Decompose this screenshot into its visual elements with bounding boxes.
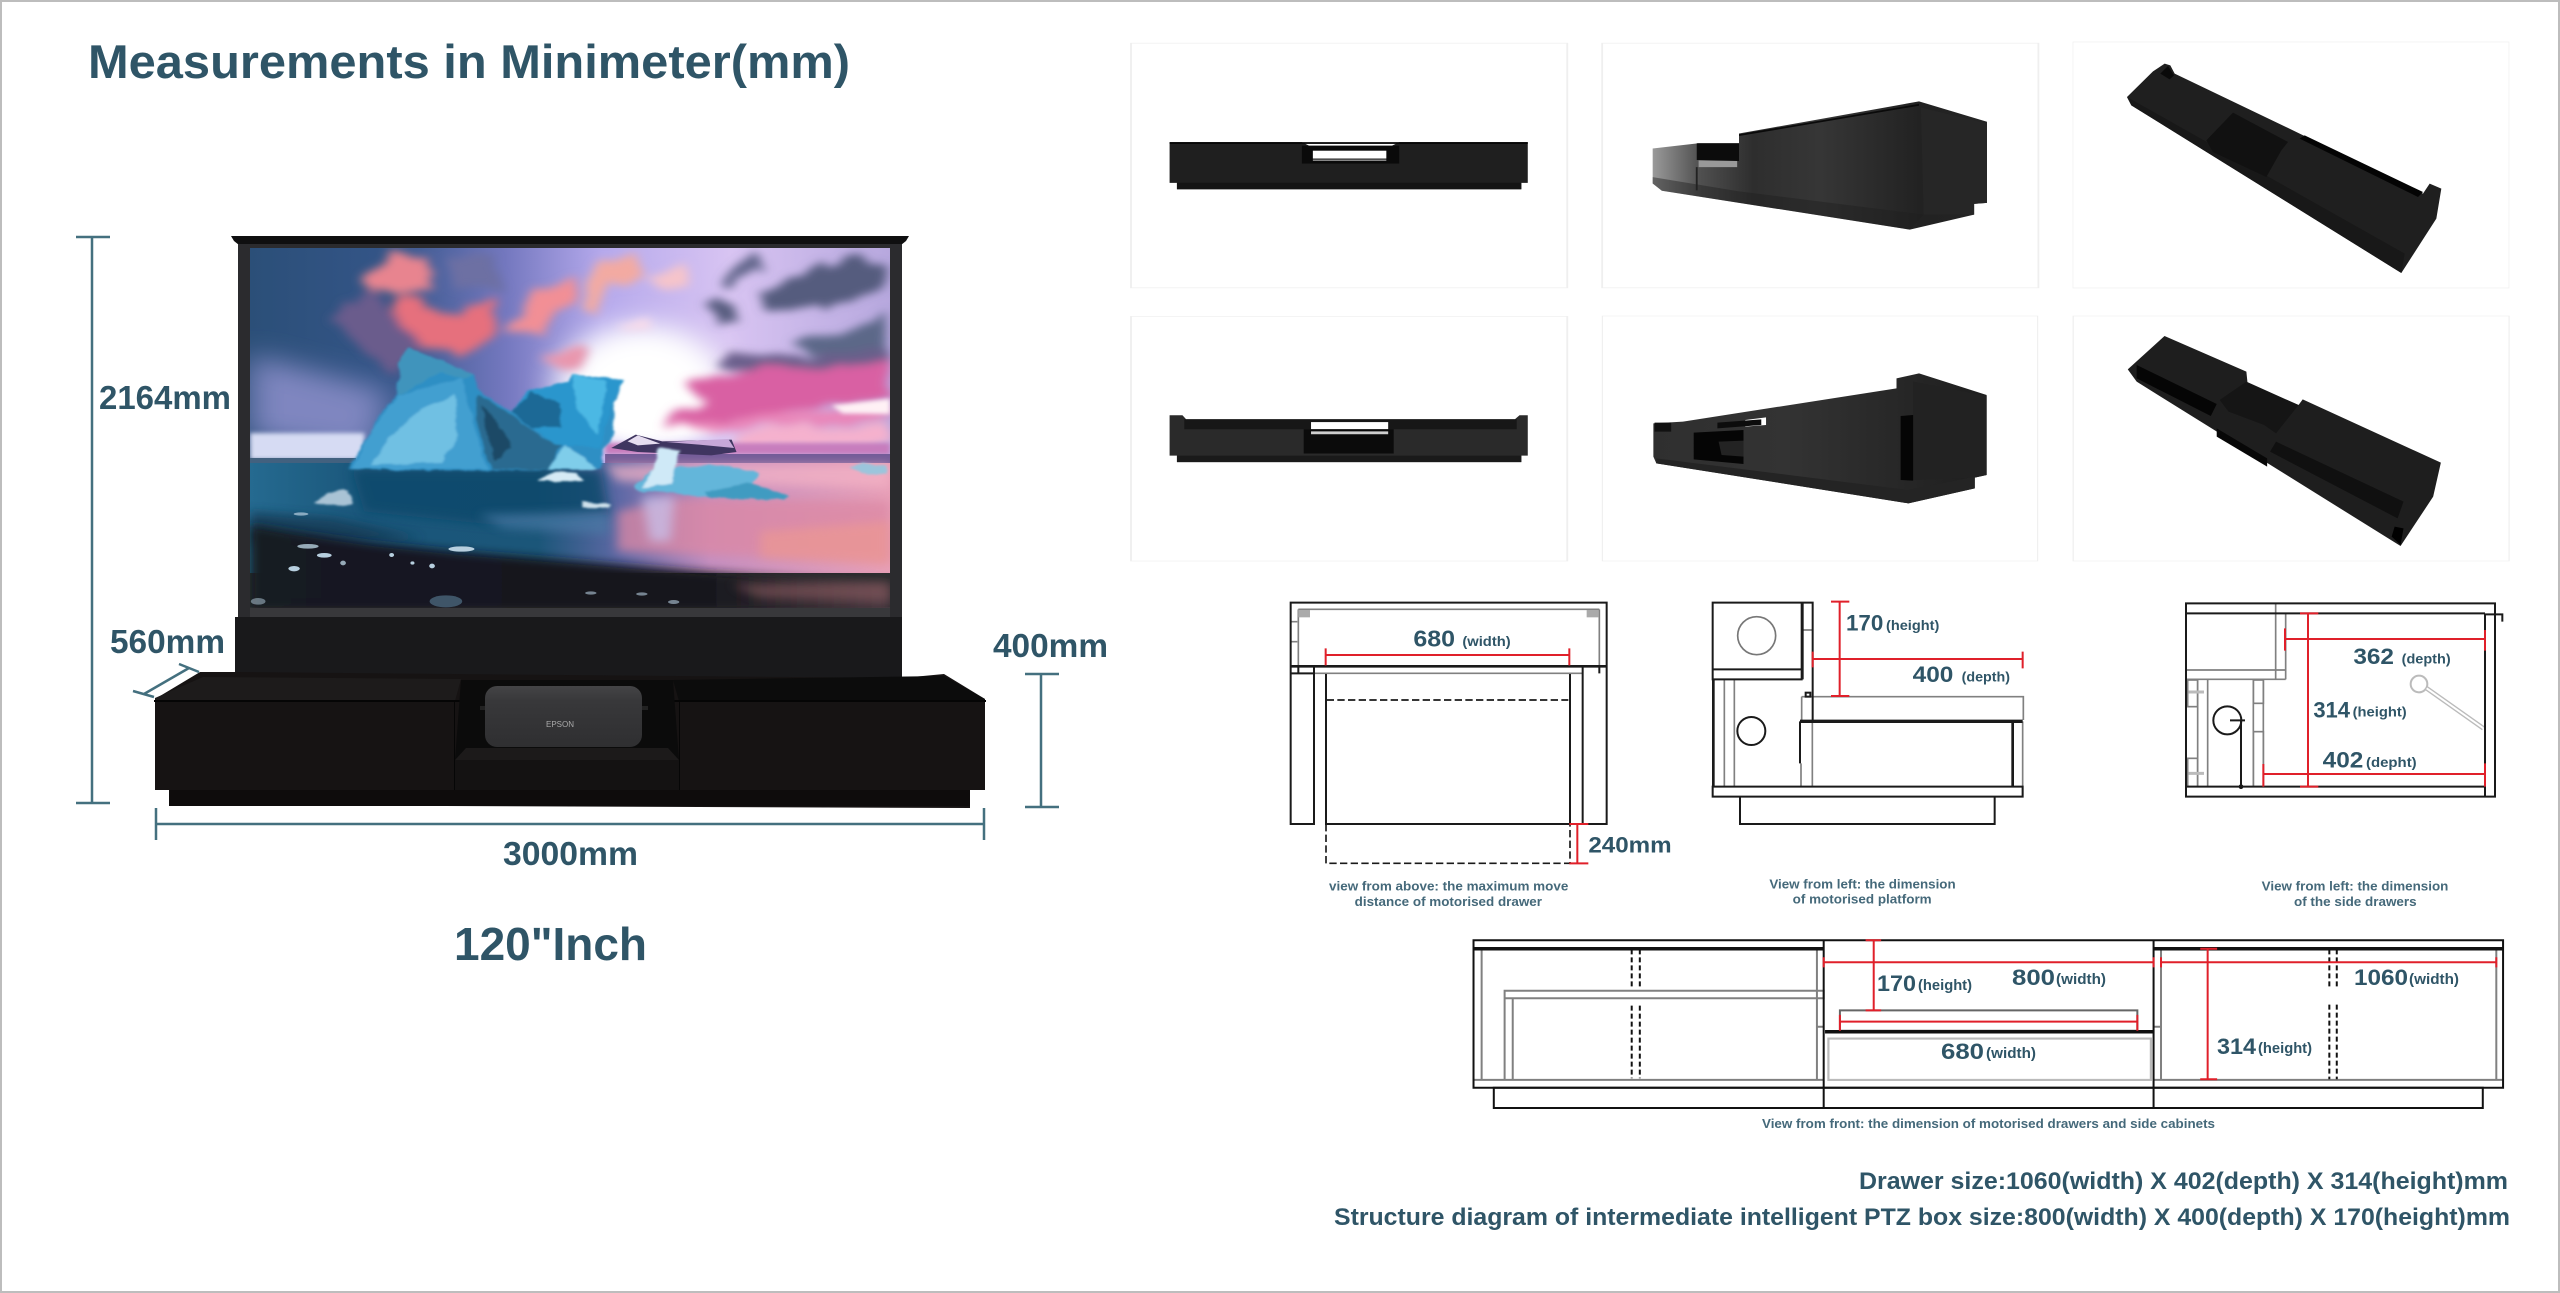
label: 680 width <box>1941 1039 2036 1064</box>
label: 362 depth: (depth) <box>2402 650 2451 666</box>
caption: distance of motorised drawer <box>1355 895 1542 909</box>
label: 1060 width: (width) <box>2409 971 2459 988</box>
label: 680 width: 680 <box>1941 1039 1984 1064</box>
label: 402 depth: 402 <box>2323 748 2363 773</box>
diagram: view from left, side drawers <box>2186 603 2502 909</box>
label: 800 width: (width) <box>2056 971 2106 988</box>
screen image: iceberg at sunset <box>250 248 890 608</box>
label: 680 width: (width) <box>1986 1045 2036 1062</box>
panel: cabinet front view, open <box>1131 316 1567 561</box>
dimension: depth 560mm <box>110 623 225 697</box>
lake <box>250 463 890 573</box>
distant mountain <box>611 435 737 455</box>
label: 362 depth: 362 <box>2353 644 2394 669</box>
label: 800 width: 800 <box>2012 965 2055 990</box>
cabinet <box>154 672 986 808</box>
caption <box>2262 880 2448 909</box>
screen housing <box>231 236 909 679</box>
caption <box>1769 877 1956 907</box>
iceberg <box>348 347 623 471</box>
label: 170 height: (height) <box>1918 977 1972 994</box>
label: 402 depth: (depht) <box>2366 754 2417 770</box>
label: 314 height: (height) <box>2353 704 2407 720</box>
diagram: view from front, drawers and side cabinets <box>1474 940 2503 1131</box>
label: 170 height: 170 <box>1846 611 1883 636</box>
dimension: cabinet height 400mm <box>993 627 1108 807</box>
caption <box>1329 880 1568 909</box>
front elevation lines <box>1474 940 2503 1108</box>
label: 170 height <box>1877 971 1972 996</box>
panel: cabinet front view, closed <box>1131 43 1567 288</box>
dimension: width 3000mm: 3000mm <box>503 835 638 872</box>
dimension: depth 560mm: 560mm <box>110 623 225 660</box>
ice floes <box>314 448 887 509</box>
label: 314 height: 314 <box>2217 1034 2257 1059</box>
beach <box>250 525 890 611</box>
summary: PTZ box size: Structure diagram of intermediate intelligent PTZ box size:800(width) X 400(depth) X 170(height)mm <box>1334 1204 2510 1231</box>
dimension: width 3000mm <box>156 808 984 872</box>
label: 170 height: (height) <box>1886 617 1939 633</box>
label: 800 width <box>2012 965 2106 990</box>
screen size label: 120"Inch <box>454 918 647 970</box>
caption: view from above: the maximum move <box>1329 880 1568 894</box>
label: 1060 width: 1060 <box>2354 965 2408 990</box>
panel: cabinet perspective view, open <box>1602 316 2038 561</box>
caption: of the side drawers <box>2294 895 2417 909</box>
panel: cabinet top-angle view, closed <box>2073 42 2509 288</box>
label: 680 width <box>1413 626 1511 652</box>
dimension: height 2164mm: 2164mm <box>99 379 231 416</box>
label: 400 depth <box>1913 662 2010 687</box>
label: 314 height <box>2313 697 2407 722</box>
pink clouds <box>332 251 890 446</box>
diagram: view from above, motorised drawer <box>1291 603 1672 909</box>
product illustration: projector screen on cabinet <box>154 236 986 808</box>
label: 400 depth: 400 <box>1913 662 1953 687</box>
label: 170 height: 170 <box>1877 971 1916 996</box>
caption: of motorised platform <box>1793 893 1932 907</box>
projector <box>485 686 642 747</box>
dimension: cabinet height 400mm: 400mm <box>993 627 1108 664</box>
label: 314 height <box>2217 1034 2312 1059</box>
summary: drawer size: Drawer size:1060(width) X 402(depth) X 314(height)mm <box>1859 1168 2508 1195</box>
label: 402 depth <box>2323 748 2417 773</box>
title: Measurements in Minimeter(mm) <box>88 35 850 88</box>
caption: View from left: the dimension <box>1769 877 1956 891</box>
label: 314 height: 314 <box>2313 697 2351 722</box>
panel: cabinet top-angle view, open <box>2073 316 2509 561</box>
caption: View from front: the dimension of motorised drawers and side cabinets <box>1762 1116 2215 1131</box>
diagram: view from left, motorised platform <box>1713 602 2023 907</box>
EPSON label: EPSON <box>546 720 574 729</box>
panel: cabinet perspective view, closed <box>1602 43 2038 288</box>
label: 314 height: (height) <box>2258 1040 2312 1057</box>
label: 362 depth <box>2353 644 2451 669</box>
label: 1060 width <box>2354 965 2459 990</box>
caption: View from left: the dimension <box>2262 880 2448 894</box>
label: 170 height <box>1846 611 1939 636</box>
label: 240mm: 240mm <box>1588 832 1672 857</box>
dimension: height 2164mm <box>76 237 231 803</box>
label: 680 width: 680 <box>1413 626 1455 652</box>
label: 680 width: (width) <box>1462 633 1511 649</box>
label: 400 depth: (depth) <box>1962 668 2010 684</box>
beach pebbles <box>251 512 679 607</box>
